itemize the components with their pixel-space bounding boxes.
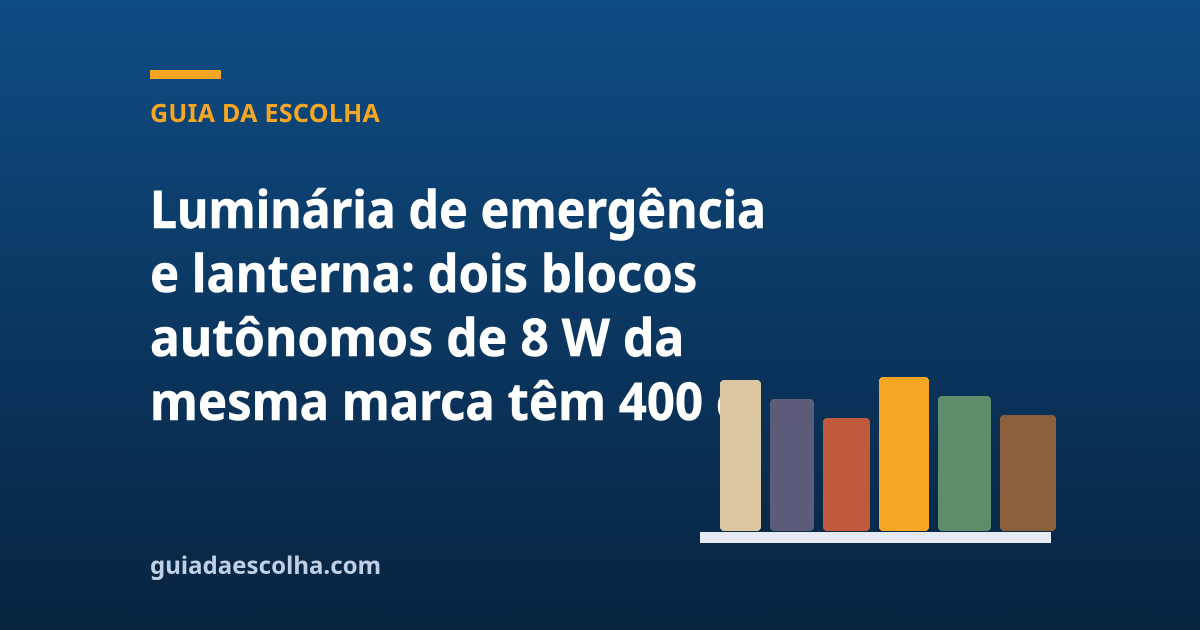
site url: guiadaescolha.com [150, 549, 381, 582]
title: autônomos de 8 W da [150, 301, 684, 372]
title: e lanterna: dois blocos [150, 237, 697, 308]
title: Luminária de emergência [150, 173, 766, 244]
title: mesma marca têm 400 c [150, 365, 741, 436]
bar 5 [938, 396, 991, 531]
bar 4 [879, 377, 929, 531]
accent bar [150, 70, 221, 79]
shelf [700, 532, 1051, 543]
bar chart: book-like bars on a shelf [700, 377, 1056, 543]
bar 6 [1000, 415, 1056, 531]
bar 2 [770, 399, 814, 531]
bar 1 [720, 380, 761, 531]
bar 3 [823, 418, 870, 531]
title [150, 173, 766, 436]
eyebrow label: GUIA DA ESCOLHA [150, 96, 380, 130]
